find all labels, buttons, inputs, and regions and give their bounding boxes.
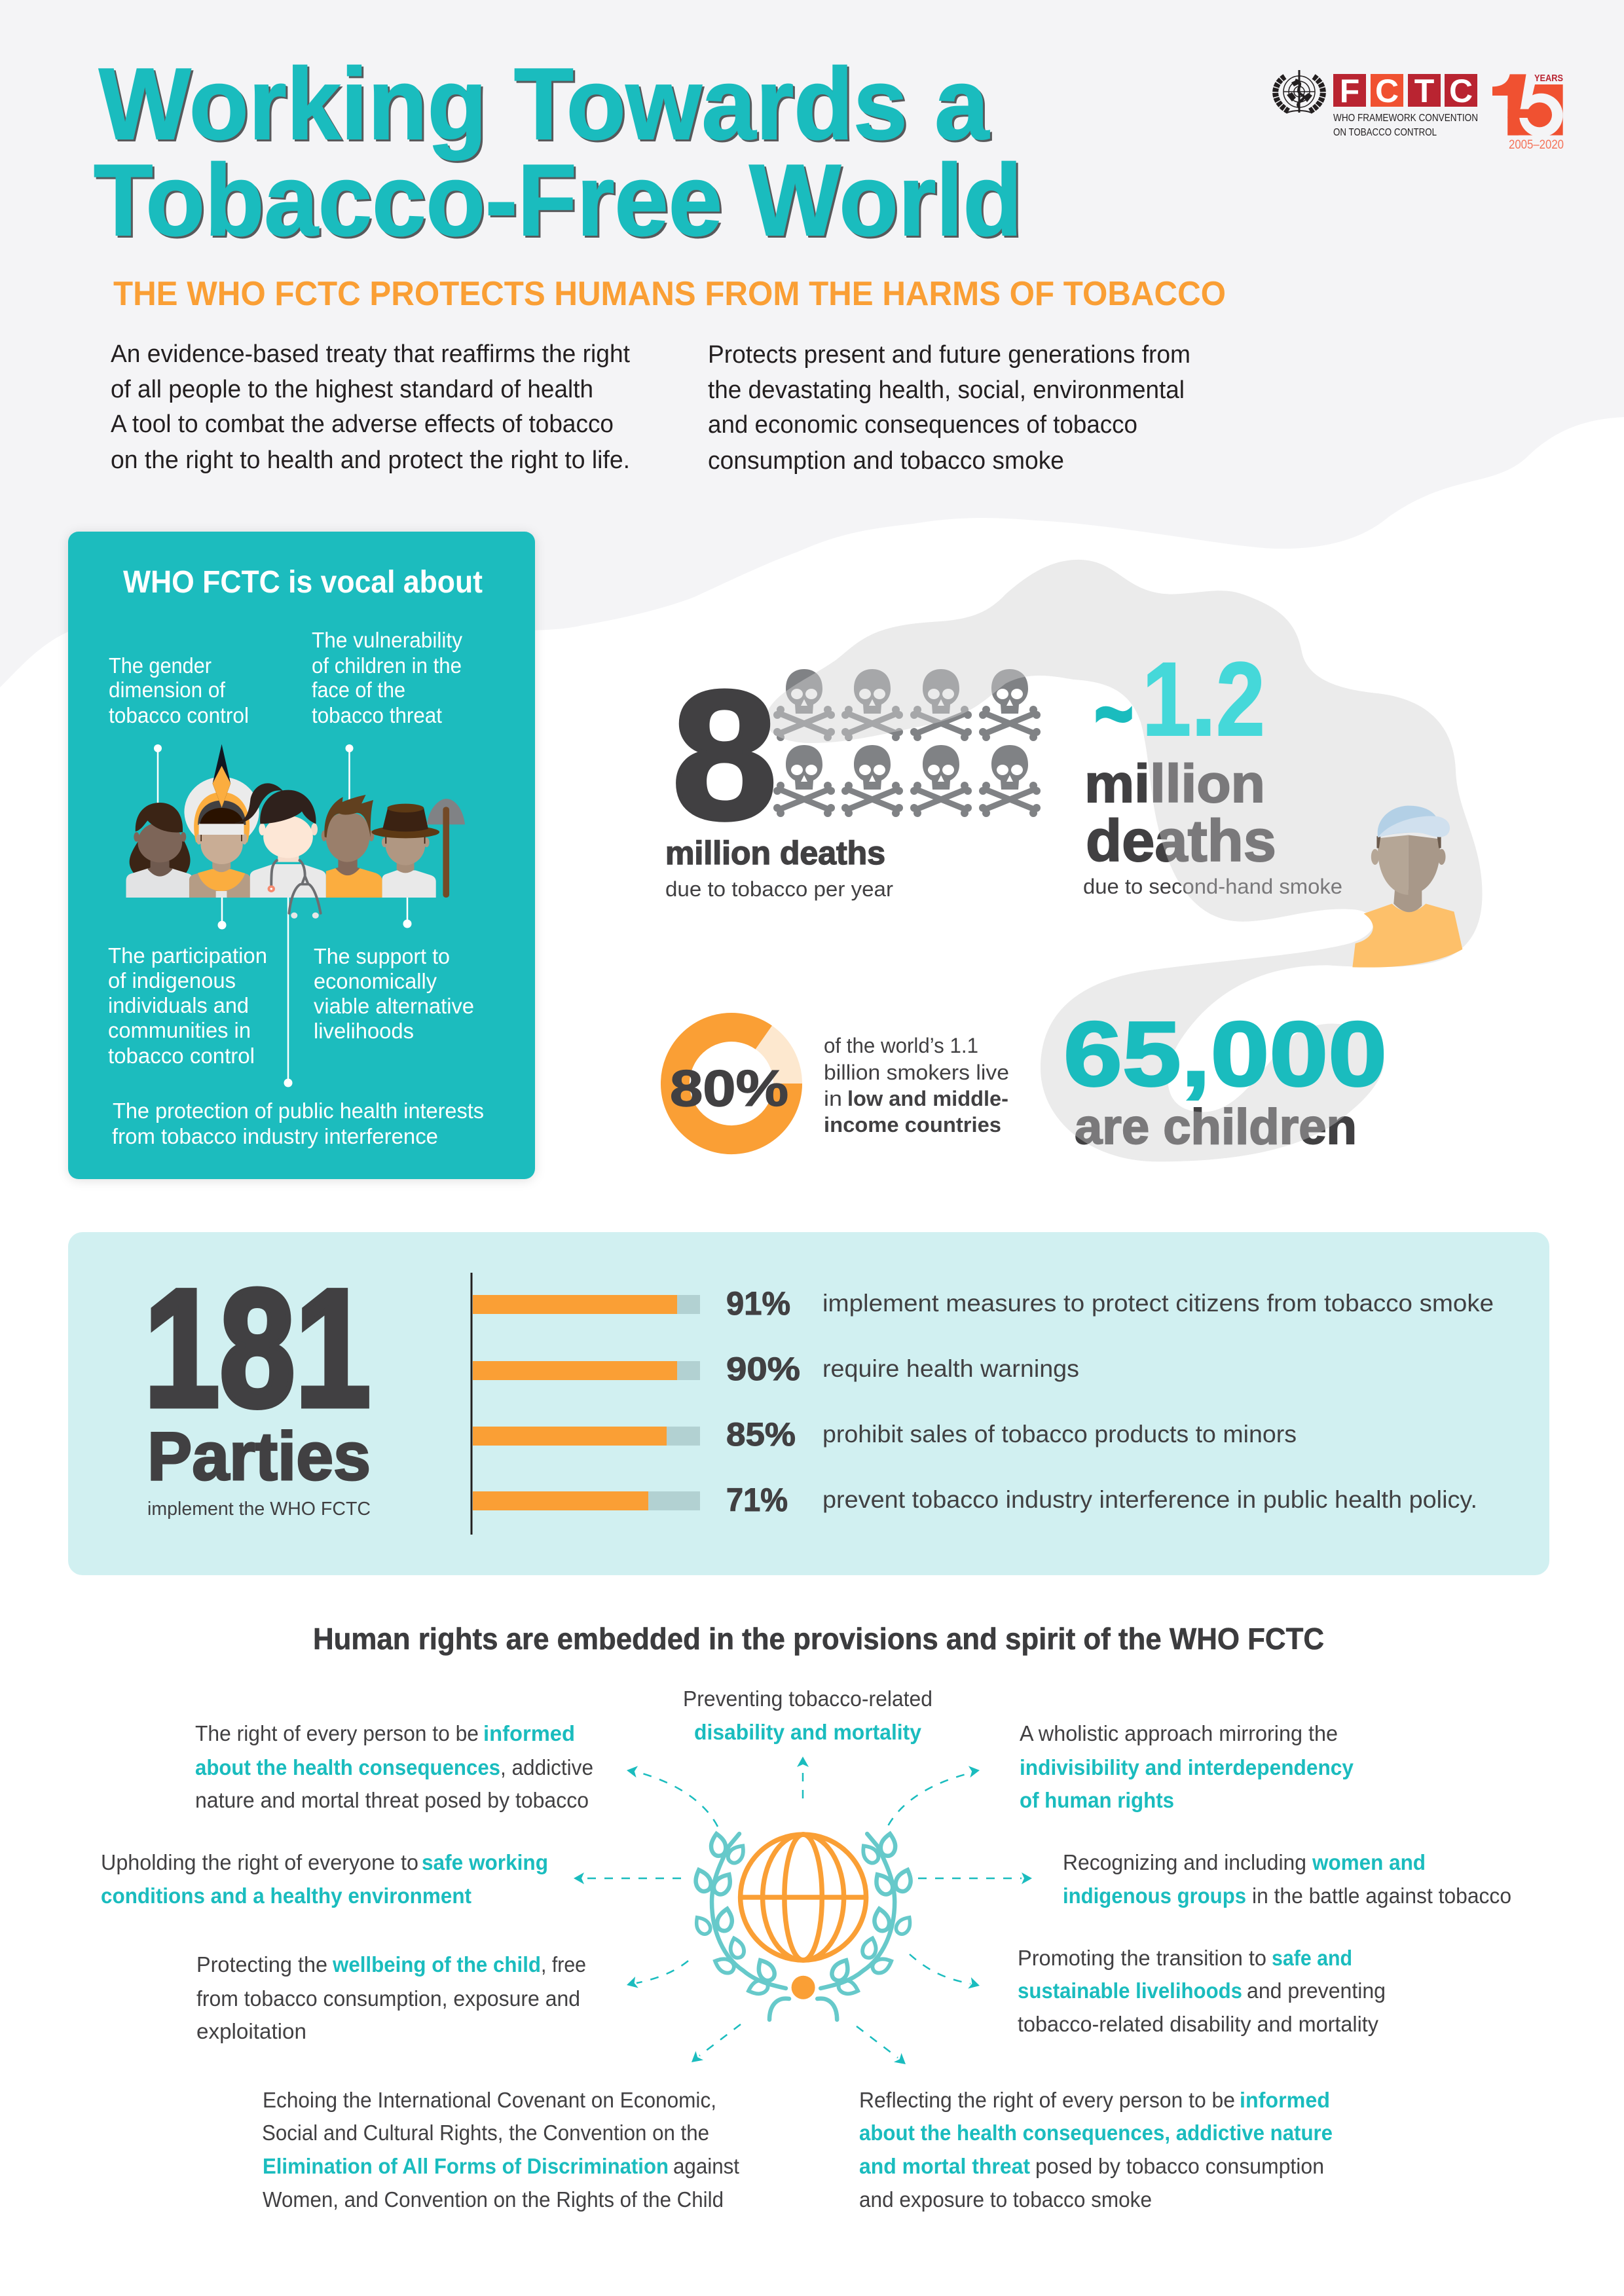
intro text right: consumption and tobacco smoke bbox=[708, 447, 1064, 475]
bar: 90% bbox=[473, 1351, 1079, 1387]
stat text: 8 million deaths bbox=[665, 835, 893, 901]
text: reflecting the right: about the health consequences, addictive nature bbox=[859, 2121, 1333, 2145]
text: informed right: informed bbox=[483, 1721, 575, 1745]
text: sustainable livelihoods bbox=[1018, 1946, 1386, 2036]
text: vulnerability of children: The vulnerability bbox=[312, 628, 462, 652]
text: reflecting the right: posed by tobacco consumption bbox=[1035, 2154, 1324, 2178]
icon grid: eight skulls bbox=[773, 669, 1041, 817]
illustration: five people bbox=[126, 744, 465, 919]
intro text left: of all people to the highest standard of health bbox=[111, 376, 593, 403]
bar: 91%: implement measures to protect citizens from tobacco smoke bbox=[822, 1290, 1494, 1317]
title bbox=[94, 47, 1022, 257]
text: wellbeing of the child: wellbeing of the child bbox=[332, 1952, 541, 1977]
panel heading: WHO FCTC is vocal about bbox=[123, 565, 483, 600]
logo: FCTC: C bbox=[1449, 73, 1473, 109]
text: wellbeing of the child: , free bbox=[541, 1952, 586, 1977]
text: reflecting the right: informed bbox=[1240, 2088, 1330, 2112]
stat: 65,000: 65,000 bbox=[1063, 1002, 1387, 1105]
text: public health protection: The protection of public health interests bbox=[113, 1099, 484, 1123]
logo: FCTC: ON TOBACCO CONTROL bbox=[1333, 127, 1437, 138]
text: informed right: The right of every person to be bbox=[195, 1721, 479, 1745]
smoke overlay bbox=[765, 560, 1482, 1161]
text: safe working conditions: Upholding the right of everyone to bbox=[101, 1850, 418, 1874]
logo: FCTC: C bbox=[1375, 73, 1399, 109]
text: international covenant: Social and Cultural Rights, the Convention on the bbox=[262, 2121, 709, 2145]
logo: FCTC: F bbox=[1340, 73, 1359, 109]
text: smokers share: low and middle- bbox=[847, 1087, 1008, 1110]
text: alternative livelihoods bbox=[314, 944, 474, 1043]
text: international covenant: Women, and Convention on the Rights of the Child bbox=[263, 2187, 724, 2212]
bar: 91%: 91% bbox=[726, 1285, 790, 1322]
stat text: million deaths second-hand bbox=[1083, 754, 1342, 898]
text: smokers share: income countries bbox=[824, 1113, 1001, 1137]
arrows: dashed radial arrows bbox=[585, 1766, 1022, 2058]
text: reflecting the right: Reflecting the right of every person to be bbox=[859, 2088, 1235, 2112]
icon: globe in laurel bbox=[692, 1832, 915, 2020]
text: indigenous participation bbox=[108, 943, 267, 1068]
text: safe working conditions: safe working bbox=[422, 1850, 548, 1874]
illustration: man with cap bbox=[1352, 806, 1462, 968]
bar: 85% bbox=[473, 1416, 1297, 1453]
text: indigenous participation: communities in bbox=[108, 1018, 251, 1042]
background wave bbox=[0, 0, 1624, 687]
text: public health protection bbox=[112, 1099, 484, 1148]
intro text left: An evidence-based treaty that reaffirms the right bbox=[111, 340, 630, 368]
person: doctor bbox=[235, 783, 326, 919]
logo: 15 years: YEARS bbox=[1534, 73, 1563, 84]
text: alternative livelihoods: livelihoods bbox=[314, 1019, 414, 1043]
stat: 181 parties: 181 bbox=[144, 1255, 371, 1442]
text: alternative livelihoods: The support to bbox=[314, 944, 450, 968]
text: vulnerability of children: tobacco threat bbox=[312, 703, 442, 727]
stat: 8: 8 bbox=[672, 653, 777, 858]
logo: FCTC: WHO FRAMEWORK CONVENTION bbox=[1333, 113, 1478, 124]
intro text right: and economic consequences of tobacco bbox=[708, 411, 1137, 439]
stat text: 8 million deaths: due to tobacco per year bbox=[665, 877, 893, 901]
text: wholistic approach: indivisibility and interdependency bbox=[1020, 1755, 1354, 1779]
text: women and indigenous groups: women and bbox=[1312, 1850, 1426, 1874]
text: vulnerability of children: face of the bbox=[312, 678, 405, 702]
text: international covenant: Elimination of All Forms of Discrimination bbox=[263, 2154, 669, 2178]
text: alternative livelihoods: economically bbox=[314, 969, 437, 993]
bar: 71%: prevent tobacco industry interference in public health policy. bbox=[822, 1486, 1477, 1513]
text: indigenous participation: individuals and bbox=[108, 993, 249, 1017]
logo: 15 years bbox=[1492, 73, 1564, 152]
text: wholistic approach: of human rights bbox=[1020, 1788, 1174, 1812]
bar: 85%: 85% bbox=[726, 1416, 796, 1453]
panel: WHO FCTC is vocal about bbox=[68, 532, 535, 1179]
heading: human rights: Human rights are embedded in the provisions and spirit of the WHO FCTC bbox=[313, 1622, 1324, 1656]
person: farmer with hat and shovel bbox=[371, 799, 465, 898]
logo: WHO emblem bbox=[1276, 70, 1323, 113]
text: preventing disability: disability and mortality bbox=[694, 1720, 922, 1744]
text: sustainable livelihoods: safe and bbox=[1272, 1946, 1352, 1970]
bar: 71% bbox=[473, 1482, 1477, 1518]
smoke shape bbox=[765, 560, 1482, 1161]
logo: FCTC: T bbox=[1414, 73, 1434, 109]
text: international covenant: against bbox=[673, 2154, 739, 2178]
text: reflecting the right bbox=[859, 2088, 1333, 2212]
text: safe working conditions bbox=[101, 1850, 548, 1908]
stat: 181 parties bbox=[144, 1255, 371, 1520]
stat: 181 parties: implement the WHO FCTC bbox=[147, 1499, 371, 1520]
text: sustainable livelihoods: tobacco-related disability and mortality bbox=[1018, 2012, 1378, 2036]
text: international covenant bbox=[262, 2088, 739, 2212]
intro text right bbox=[708, 341, 1190, 475]
intro text left: A tool to combat the adverse effects of tobacco bbox=[111, 410, 614, 438]
text: women and indigenous groups: indigenous groups bbox=[1063, 1884, 1246, 1908]
text: smokers share bbox=[824, 1034, 1009, 1137]
logo: 15 years: 2005–2020 bbox=[1509, 138, 1564, 152]
intro text right: the devastating health, social, environmental bbox=[708, 376, 1185, 404]
intro text left: on the right to health and protect the right to life. bbox=[111, 446, 630, 474]
text: wellbeing of the child bbox=[196, 1952, 586, 2043]
text: vulnerability of children: of children in the bbox=[312, 653, 462, 678]
text: sustainable livelihoods: and preventing bbox=[1247, 1978, 1386, 2003]
text: gender dimension bbox=[109, 653, 249, 727]
arrowheads bbox=[574, 1757, 1032, 2069]
text: reflecting the right: and exposure to tobacco smoke bbox=[859, 2187, 1152, 2212]
text: indigenous participation: of indigenous bbox=[108, 968, 236, 993]
stat: donut 80% bbox=[670, 1027, 788, 1140]
bar: 85%: prohibit sales of tobacco products to minors bbox=[822, 1421, 1297, 1448]
text: gender dimension: dimension of bbox=[109, 678, 226, 702]
text: smokers share: billion smokers live bbox=[824, 1061, 1009, 1084]
connector lines bbox=[154, 744, 411, 1087]
person: man with spiky hair bbox=[322, 795, 382, 898]
text: vulnerability of children bbox=[312, 628, 462, 727]
text: smokers share: in bbox=[824, 1087, 842, 1110]
stat: 1.2 bbox=[1094, 640, 1265, 763]
bar: 90%: require health warnings bbox=[822, 1355, 1079, 1382]
text: sustainable livelihoods: Promoting the transition to bbox=[1018, 1946, 1266, 1970]
text: wellbeing of the child: exploitation bbox=[196, 2019, 306, 2043]
intro text right: Protects present and future generations from bbox=[708, 341, 1190, 369]
stat: 181 parties: Parties bbox=[147, 1419, 371, 1495]
person: indigenous with feather bbox=[184, 744, 259, 898]
stat text: million deaths second-hand: due to second-hand smoke bbox=[1083, 875, 1342, 898]
text: smokers share: of the world’s 1.1 bbox=[824, 1034, 978, 1057]
text: wholistic approach: A wholistic approach mirroring the bbox=[1020, 1721, 1338, 1745]
text: informed right: nature and mortal threat posed by tobacco bbox=[195, 1788, 589, 1812]
stat: 1.2: ~ bbox=[1094, 664, 1134, 763]
text: informed right bbox=[195, 1721, 593, 1812]
text: women and indigenous groups bbox=[1063, 1850, 1511, 1908]
text: gender dimension: tobacco control bbox=[109, 703, 249, 727]
text: gender dimension: The gender bbox=[109, 653, 212, 678]
stat: donut 80%: 80% bbox=[670, 1059, 788, 1117]
logo: FCTC bbox=[1333, 73, 1478, 138]
text: international covenant: Echoing the International Covenant on Economic, bbox=[263, 2088, 716, 2112]
text: indigenous participation: The participation bbox=[108, 943, 267, 968]
text: sustainable livelihoods: sustainable livelihoods bbox=[1018, 1978, 1242, 2003]
text: reflecting the right: and mortal threat bbox=[859, 2154, 1030, 2178]
bar: 71%: 71% bbox=[726, 1482, 788, 1518]
title: Working Towards a bbox=[99, 47, 990, 160]
stat text: are children: are children bbox=[1075, 1099, 1357, 1155]
person: woman bbox=[126, 803, 192, 898]
panel: 181 parties bbox=[68, 1232, 1549, 1575]
subheading: THE WHO FCTC PROTECTS HUMANS FROM THE HARMS OF TOBACCO bbox=[113, 275, 1226, 313]
text: wholistic approach bbox=[1020, 1721, 1354, 1812]
text: public health protection: from tobacco industry interference bbox=[112, 1124, 438, 1148]
stat text: 8 million deaths: million deaths bbox=[665, 835, 885, 871]
text: safe working conditions: conditions and a healthy environment bbox=[101, 1884, 471, 1908]
bar: 90%: 90% bbox=[726, 1351, 800, 1387]
text: wellbeing of the child: from tobacco consumption, exposure and bbox=[196, 1986, 580, 2011]
text: informed right: about the health consequences bbox=[195, 1755, 500, 1779]
stat text: million deaths second-hand: deaths bbox=[1086, 809, 1276, 874]
text: preventing disability bbox=[683, 1686, 932, 1744]
text: informed right: , addictive bbox=[500, 1755, 593, 1779]
text: wellbeing of the child: Protecting the bbox=[196, 1952, 327, 1977]
stat: 1.2: 1.2 bbox=[1142, 640, 1265, 757]
stat text: million deaths second-hand: million bbox=[1084, 754, 1265, 814]
title: Tobacco-Free World bbox=[94, 143, 1022, 257]
text: preventing disability: Preventing tobacco-related bbox=[683, 1686, 932, 1711]
intro text left bbox=[111, 340, 630, 474]
text: indigenous participation: tobacco control bbox=[108, 1044, 255, 1068]
text: women and indigenous groups: in the battle against tobacco bbox=[1252, 1884, 1511, 1908]
text: women and indigenous groups: Recognizing and including bbox=[1063, 1850, 1306, 1874]
bar: 91% bbox=[473, 1285, 1494, 1322]
text: alternative livelihoods: viable alternative bbox=[314, 994, 474, 1018]
bar chart bbox=[470, 1273, 1494, 1535]
